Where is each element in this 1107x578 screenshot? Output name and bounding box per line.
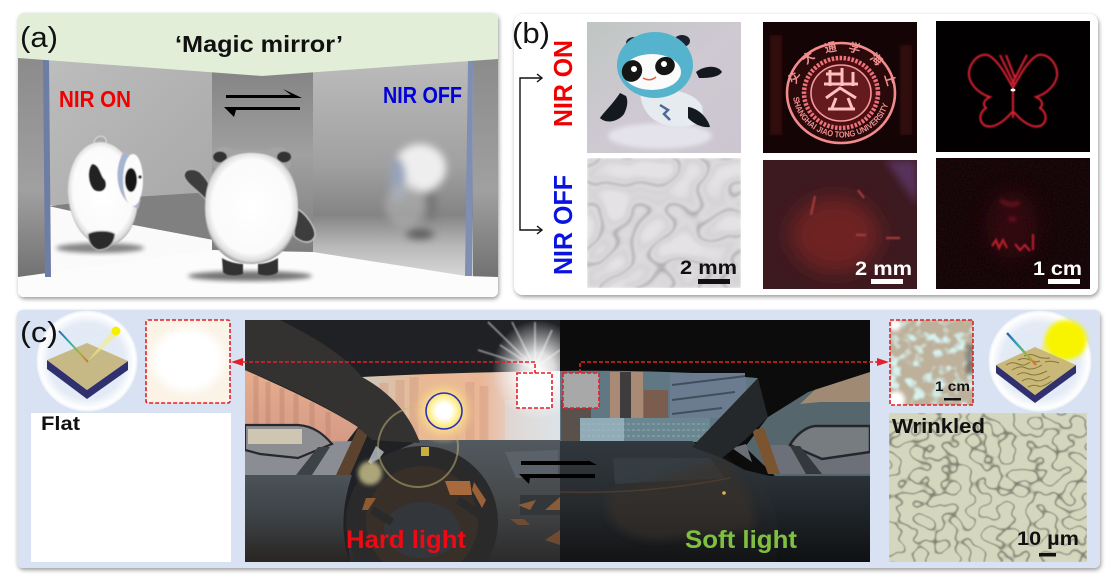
emblem: 交 大 通 学 海 上 [788,41,896,86]
right edge wall [473,55,498,280]
label (b): (b) [512,18,550,50]
emblem [786,41,896,144]
panel label (a): (a) [20,22,58,54]
right A-pillar and roof [692,372,870,458]
right blue mirror post [465,60,473,276]
label (c): (c) [20,317,58,349]
inset: wrinkled film iridescent: 1 cm [935,378,970,394]
panel b: NIR on/off comparison [512,13,1102,300]
gray patch [563,373,599,408]
right side window [732,372,870,476]
butterfly outline [969,55,1057,127]
panda: blurred reflection [385,144,446,239]
right dashboard [560,441,790,562]
vertical label NIR OFF: NIR OFF [548,175,578,275]
left windshield [362,371,560,441]
right mirror [313,55,473,277]
label: NIR ON: NIR ON [59,86,131,112]
label: NIR OFF: NIR OFF [383,82,462,108]
reversible arrows [224,89,302,117]
inset: flat film glare [146,320,230,403]
right windshield [560,371,758,442]
heading: magic mirror: ‘Magic mirror’ [175,31,343,57]
panel a: magic mirror scene [18,13,498,297]
panel c: hard light vs soft light [17,310,1100,578]
photo: university emblem hologram [763,22,917,153]
wrinkled surface micrograph [889,413,1087,562]
left wall and mirror [18,55,213,280]
dashed callout boxes and arrows [237,362,884,408]
lens flares [358,407,458,487]
panda: left reflection [56,136,144,253]
arrowhead: toward wrinkled inset [877,358,889,366]
wrinkled surface micrograph: 10 µm [1017,529,1079,550]
bracket double arrow [520,74,542,234]
label: hard light: Hard light [346,526,467,554]
reversible arrows [519,456,597,484]
steering wheel [356,447,488,578]
left A-pillar [245,320,420,443]
arrowhead: toward flat inset [231,358,243,366]
scale bar 1 cm white [1034,262,1081,284]
vertical label NIR ON: NIR ON [548,40,578,127]
right half roof [560,320,870,476]
centre wall [212,72,313,252]
scale bar 2 mm white [856,262,911,284]
photo: butterfly, NIR off [936,158,1090,289]
floor [18,250,498,280]
sunlight rays [478,320,584,420]
icon: wrinkled film sphere [989,311,1091,411]
photo: panda hologram [587,22,741,153]
inset: wrinkled film iridescent [887,319,974,409]
left dashboard [349,440,560,562]
photo: textured film, NIR off [587,158,741,288]
photo: emblem, NIR off [763,160,917,289]
car interior scene [245,320,870,578]
left side window with buildings [245,370,384,476]
left blue mirror post [43,60,51,277]
green header banner [18,13,498,76]
wrinkled surface micrograph: Wrinkled [892,416,985,438]
photo: butterfly hologram [936,21,1090,152]
right door [770,476,870,558]
flat surface image [31,413,231,562]
left half roof [245,320,560,562]
scale bar 2 mm: 2 mm [680,258,737,279]
scale bar 2 mm white: 2 mm [855,259,912,280]
left door panel [245,475,352,562]
sun glare [415,385,472,444]
blue circle marker [426,393,462,429]
emblem: SHANGHAI JIAO TONG UNIVERSITY [793,97,888,138]
label: soft light: Soft light [685,526,798,554]
panda: centre back view [184,147,315,281]
icon: flat film sphere [37,311,137,411]
flat surface image: Flat [41,414,81,435]
scale bar 1 cm white: 1 cm [1033,259,1082,280]
